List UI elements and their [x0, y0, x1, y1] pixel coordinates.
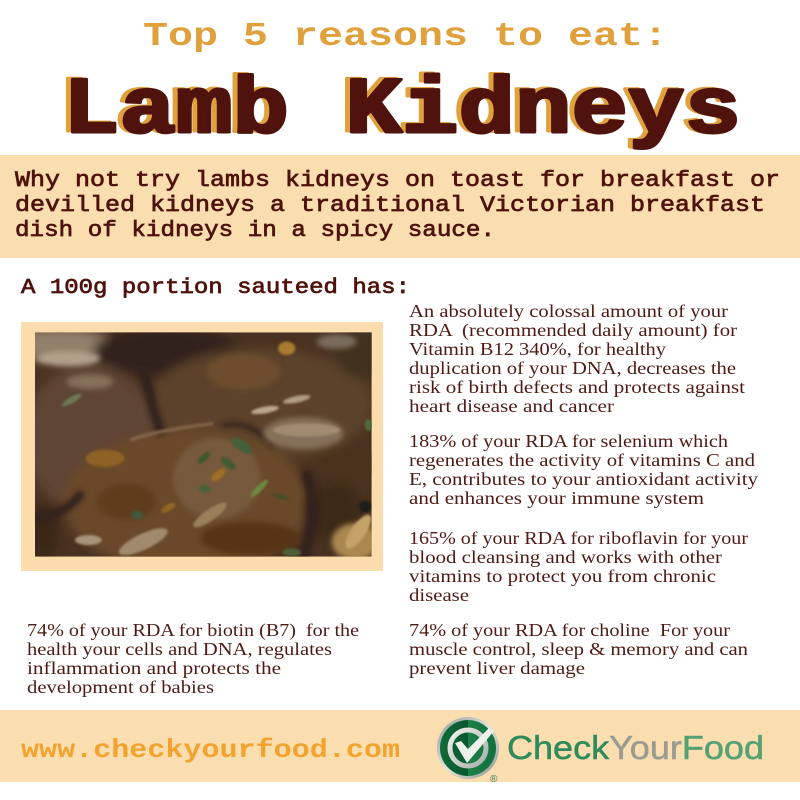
title: Lamb Kidneys: Lamb Kidneys	[58, 65, 736, 156]
text block: vitamin B12: An absolutely colossal amount of your	[409, 301, 728, 321]
text block: selenium: E, contributes to your antioxidant activity	[409, 469, 758, 489]
icon: CheckYourFood logo badge	[437, 717, 499, 785]
title: Lamb Kidneys: Lamb Kidneys	[63, 66, 741, 157]
intro text: dish of kidneys in a spicy sauce.	[15, 218, 495, 243]
text block: vitamin B12: risk of birth defects and protects against	[409, 377, 745, 397]
text block: riboflavin: vitamins to protect you from chronic	[409, 566, 716, 586]
text block: vitamin B12: duplication of your DNA, decreases the	[409, 358, 736, 378]
text block: vitamin B12: heart disease and cancer	[409, 396, 614, 416]
icon: CheckYourFood logo badge: ®	[490, 774, 498, 785]
text block: selenium: 183% of your RDA for selenium which	[409, 431, 728, 451]
text block: riboflavin: 165% of your RDA for riboflavin for your	[409, 528, 748, 548]
text block: vitamin B12: Vitamin B12 340%, for healthy	[409, 339, 666, 359]
title line: Top 5 reasons to eat: Top 5 reasons to eat:	[143, 18, 668, 55]
heading: portion: A 100g portion sauteed has:	[21, 277, 410, 300]
text block: riboflavin: disease	[409, 585, 469, 605]
creases between kidneys	[35, 372, 313, 557]
intro text: Why not try lambs kidneys on toast for breakfast or	[15, 168, 780, 193]
text block: choline: prevent liver damage	[409, 658, 585, 678]
photo frame	[3, 322, 393, 573]
text block: biotin: inflammation and protects the	[27, 658, 281, 678]
intro text	[15, 168, 780, 243]
intro text: devilled kidneys a traditional Victorian breakfast	[15, 193, 765, 218]
panel: intro band	[0, 155, 800, 258]
text block: selenium: regenerates the activity of vitamins C and	[409, 450, 755, 470]
text block: selenium: and enhances your immune system	[409, 488, 704, 508]
text block: biotin	[27, 620, 359, 697]
logo wordmark: Check YourFood	[507, 729, 764, 766]
text block: choline: muscle control, sleep & memory and can	[409, 639, 748, 659]
text block: biotin: 74% of your RDA for biotin (B7) for the	[27, 620, 359, 641]
text block: biotin: development of babies	[27, 677, 214, 697]
text block: choline	[409, 620, 748, 678]
text block: selenium	[409, 431, 758, 508]
photo: sauteed lamb kidneys in gravy	[35, 332, 372, 557]
text block: riboflavin: blood cleansing and works with other	[409, 547, 722, 567]
text block: riboflavin	[409, 528, 748, 605]
text block: biotin: health your cells and DNA, regulates	[27, 639, 332, 659]
website url: www.checkyourfood.com	[21, 735, 400, 765]
text block: vitamin B12	[409, 301, 745, 416]
text block: vitamin B12: RDA (recommended daily amount) for	[409, 320, 737, 341]
text block: choline: 74% of your RDA for choline For your	[409, 620, 730, 640]
panel: footer band	[0, 710, 800, 785]
